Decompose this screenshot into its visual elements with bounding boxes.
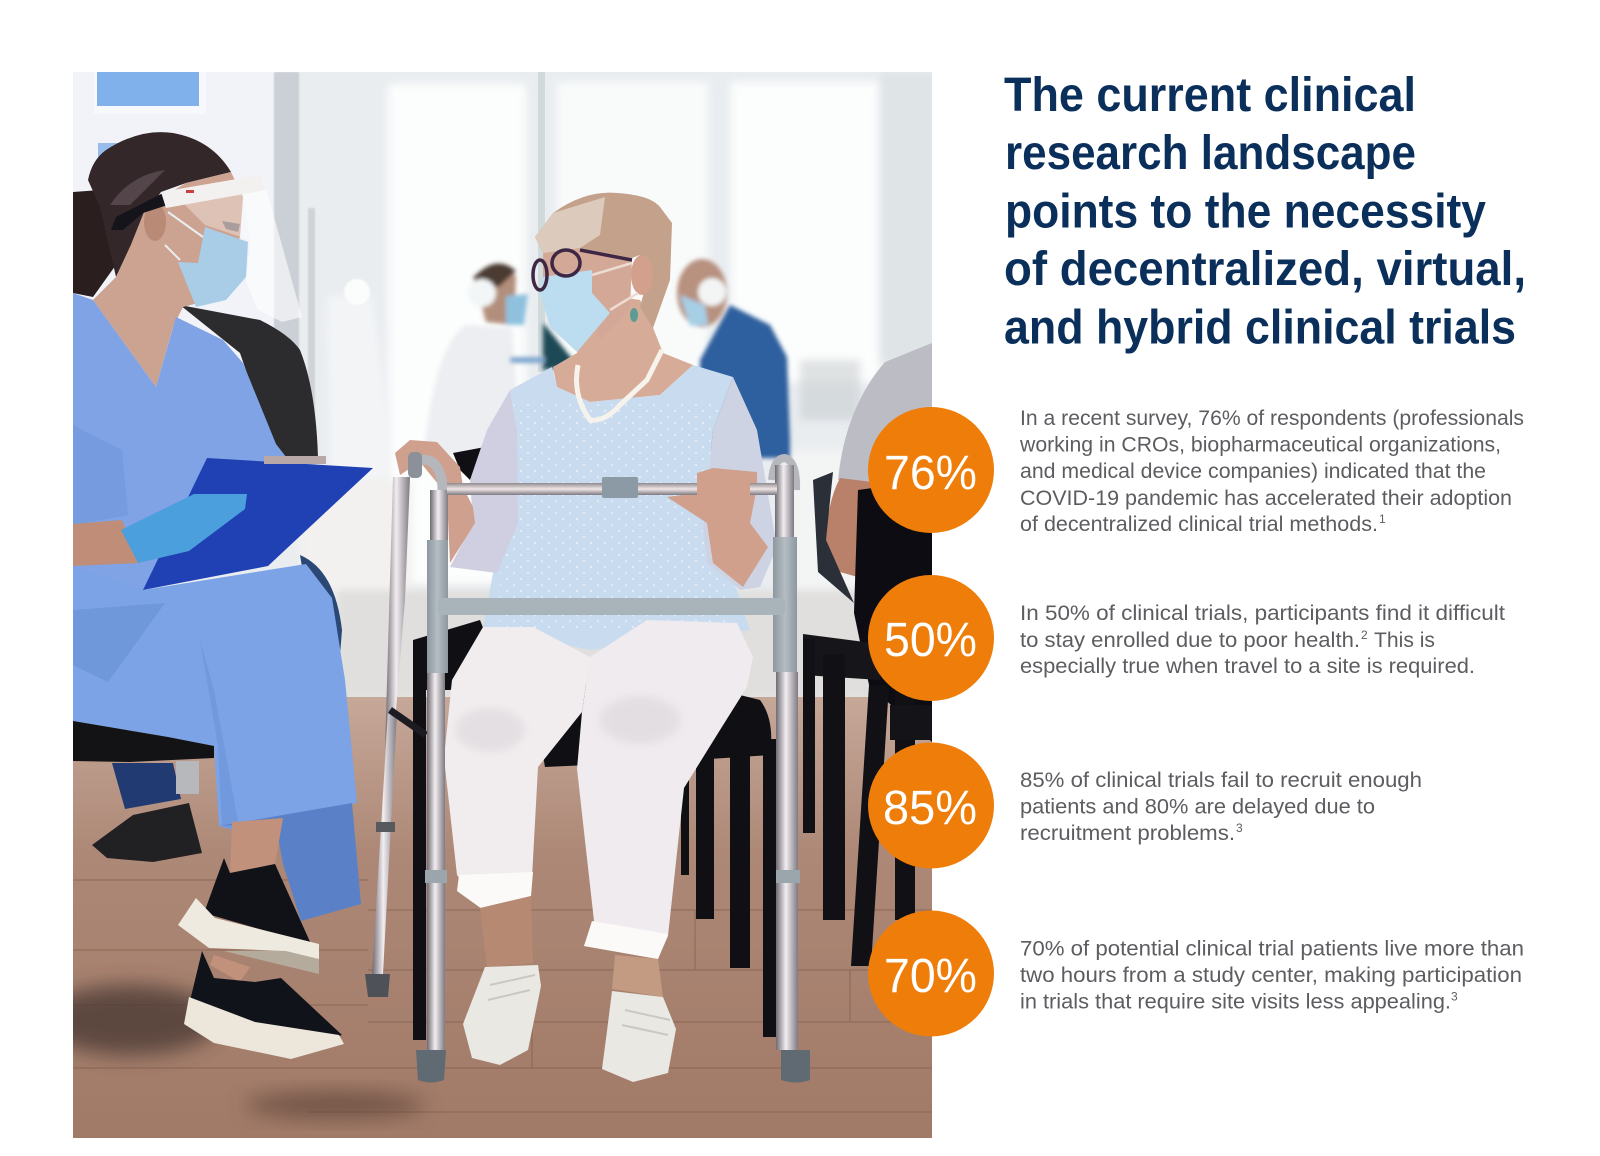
background doctor in white coat	[424, 263, 578, 455]
photo: nurse talking with patient using a walker in a clinic waiting room	[40, 72, 939, 1142]
text block: 50% enrolment	[1020, 601, 1505, 678]
nurse lower shoe	[190, 951, 342, 1036]
text block: 76% survey: of decentralized clinical trial methods.	[1020, 512, 1378, 536]
floor	[40, 590, 937, 1142]
text block: 85% recruitment: recruitment problems.	[1020, 821, 1235, 845]
text block: 85% recruitment: 85% of clinical trials fail to recruit enough	[1020, 768, 1422, 792]
text block: 76% survey: COVID-19 pandemic has accelerated their adoption	[1020, 486, 1512, 510]
nurse eye	[222, 221, 240, 232]
nurse forearm	[73, 520, 140, 566]
patient trousers	[444, 627, 590, 908]
patient ankles	[480, 896, 533, 967]
text block: 50% enrolment: 2	[1361, 628, 1368, 642]
text block: 76% survey	[1019, 406, 1524, 536]
text block: 50% enrolment: This is	[1374, 628, 1435, 652]
patient shoes	[463, 965, 541, 1065]
nurse face and neck	[93, 172, 243, 387]
title: of decentralized, virtual,	[1004, 243, 1526, 296]
text block: 76% survey: In a recent survey, 76% of respondents (professionals	[1020, 406, 1524, 430]
stat badge: 85%: 85%	[883, 782, 977, 835]
nurse	[73, 132, 373, 1059]
walking frame	[365, 452, 810, 1082]
title: The current clinical	[1004, 69, 1416, 122]
patient ear	[631, 255, 653, 295]
text block: 50% enrolment: especially true when travel to a site is required.	[1020, 654, 1475, 678]
photo background: clinic wall and windows	[73, 72, 932, 606]
patient face	[543, 248, 632, 298]
patient right forearm and hand	[667, 468, 768, 587]
patient's chair	[413, 447, 783, 1040]
title: points to the necessity	[1005, 186, 1486, 238]
patient glasses	[533, 250, 632, 290]
text block: 70% distance: 3	[1451, 990, 1458, 1004]
nurse pants	[73, 564, 357, 832]
shield strap	[111, 194, 166, 230]
patient neck	[553, 293, 693, 402]
stat badge: 76%: 76%	[884, 447, 977, 500]
patient right sleeve	[703, 377, 777, 590]
patient earring	[630, 308, 638, 322]
text block: 50% enrolment: to stay enrolled due to poor health.	[1020, 628, 1360, 652]
patient blouse body	[483, 365, 750, 650]
title: and hybrid clinical trials	[1004, 302, 1516, 354]
patient mask	[540, 270, 610, 352]
stat badge: 50%: 50%	[884, 614, 977, 667]
text block: 85% recruitment	[1020, 768, 1422, 845]
nurse raised shoe	[204, 858, 311, 944]
patient	[395, 193, 777, 1082]
stat badge: 70%	[868, 910, 994, 1036]
text block: 76% survey: working in CROs, biopharmaceutical organizations,	[1019, 432, 1501, 456]
text block: 70% distance: in trials that require site visits less appealing.	[1020, 990, 1451, 1014]
nurse hair	[88, 132, 231, 277]
text block: 50% enrolment: In 50% of clinical trials, participants find it difficult	[1020, 601, 1505, 625]
stat badge: 70%: 70%	[884, 950, 977, 1003]
text block: 85% recruitment: patients and 80% are delayed due to	[1020, 794, 1375, 818]
nurse ear	[144, 207, 166, 241]
patient hair	[535, 193, 672, 328]
text block: 70% distance: 70% of potential clinical trial patients live more than	[1020, 936, 1524, 960]
text block: 70% distance: two hours from a study center, making participation	[1020, 963, 1522, 987]
title: research landscape	[1005, 127, 1416, 180]
face shield	[272, 213, 302, 322]
background man in blue jacket	[677, 259, 790, 458]
patient left arm and hand	[395, 440, 475, 563]
right-side seated person and chairs	[803, 343, 932, 966]
trouser cuffs	[457, 872, 533, 909]
nurse raised ankle	[230, 818, 283, 873]
patient necklace	[576, 350, 662, 420]
text block: 70% distance	[1020, 936, 1524, 1014]
nurse ponytail	[73, 190, 118, 297]
person behind the nurse	[92, 305, 342, 862]
stat badge: 76%	[868, 407, 994, 533]
title	[1004, 69, 1526, 354]
nurse mask	[178, 227, 248, 307]
patient left sleeve	[450, 390, 518, 573]
nurse lower ankle	[210, 955, 250, 982]
stat badge: 85%	[868, 742, 994, 868]
stat badge: 50%	[868, 575, 994, 701]
text block: 76% survey: 1	[1379, 512, 1386, 526]
text block: 76% survey: and medical device companies) indicated that the	[1020, 459, 1486, 483]
nurse scrub top	[73, 293, 290, 592]
stool seat	[73, 721, 214, 762]
clipboard	[143, 458, 373, 590]
text block: 85% recruitment: 3	[1236, 821, 1243, 835]
glove	[121, 494, 247, 563]
